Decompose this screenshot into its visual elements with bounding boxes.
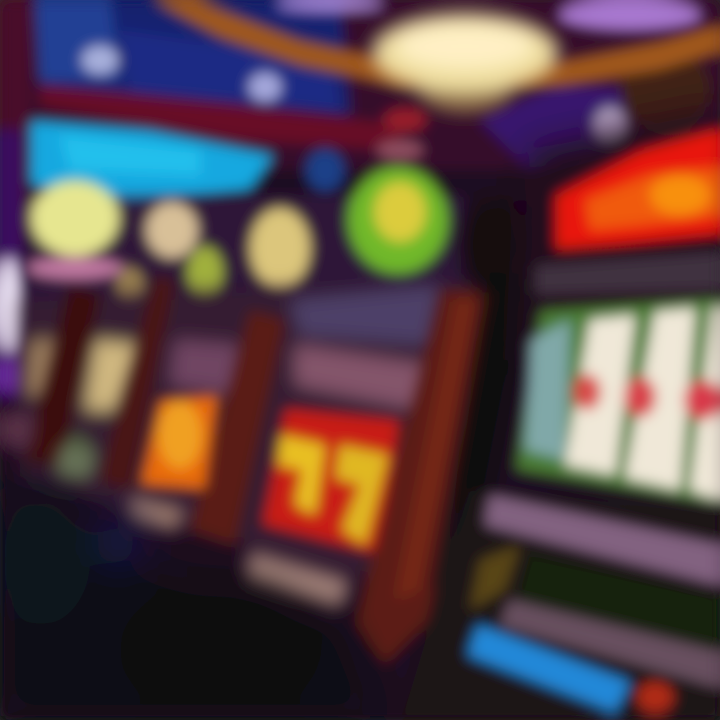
lucky sevens screen: [262, 408, 400, 555]
middle machine bodies: [20, 280, 480, 600]
cyan sign panel: [30, 108, 427, 205]
machine toppers: [25, 140, 465, 305]
right reel screen: [515, 298, 720, 505]
ceiling and upper background: [0, 0, 720, 400]
lower right machine panel: [400, 490, 720, 720]
ceiling lamp: [373, 15, 557, 111]
orange ceiling arc: [150, 0, 720, 86]
left edge light: [0, 255, 20, 393]
brown machine pillars: [25, 275, 285, 545]
cream lower panels: [0, 410, 350, 610]
red and orange topper sign: [520, 110, 720, 360]
main brown pillar and dark edge: [355, 200, 530, 665]
dark foreground chairs: [0, 490, 380, 720]
orange slot screen: [140, 395, 218, 490]
